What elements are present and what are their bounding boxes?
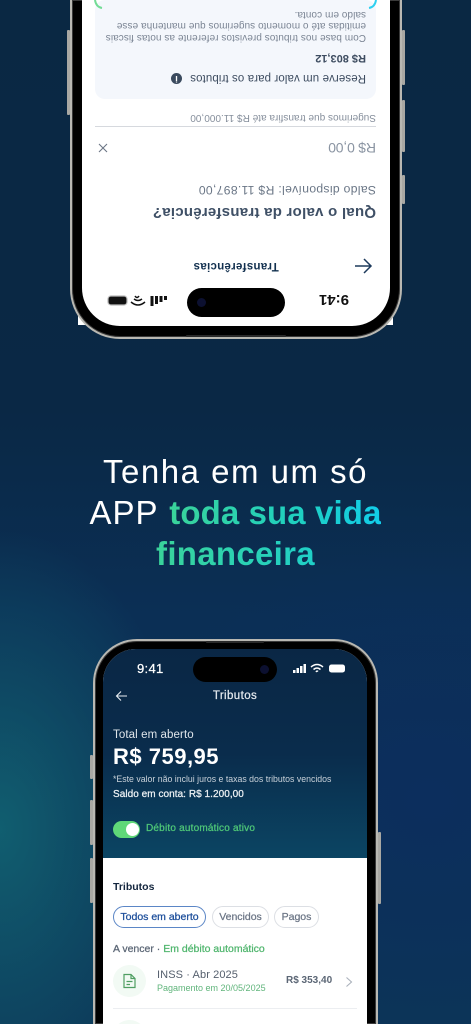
dynamic island [187, 288, 285, 317]
info icon: i [175, 74, 178, 84]
screen title: Transferências [193, 260, 279, 272]
filter chip: all: Todos em aberto [120, 911, 199, 923]
phone frame [93, 639, 378, 1024]
section title: Tributos [113, 881, 154, 893]
card description: saldo em conta. [294, 9, 366, 20]
row divider [113, 1008, 357, 1009]
panel: lower phone [90, 639, 381, 1024]
filter chip: paid [274, 906, 319, 928]
total amount: R$ 759,95 [113, 744, 219, 769]
tax row icon [113, 965, 146, 997]
filter chip: overdue [212, 906, 269, 928]
heading [90, 453, 381, 572]
tax row amount: R$ 353,40 [286, 975, 332, 986]
status time: 9:41 [319, 291, 349, 308]
panel: reserve tax card [95, 0, 376, 99]
card description: Com base nos tributos previstos referente as notas fiscais [106, 32, 366, 43]
phone frame [70, 0, 402, 339]
question heading: Qual o valor da transferência? [153, 204, 376, 221]
tax row chevron [346, 977, 352, 987]
clear icon [98, 144, 108, 152]
next row icon [119, 1020, 140, 1024]
tax row date: Pagamento em 20/05/2025 [157, 983, 266, 993]
disclaimer: *Este valor não inclui juros e taxas dos tributos vencidos [113, 774, 331, 784]
phone screen [103, 649, 367, 1024]
group label: A vencer · Em débito automático [113, 943, 265, 955]
toggle [113, 820, 140, 838]
card gradient corners [94, 0, 377, 9]
card title: Reserve um valor para os tributos [190, 72, 366, 84]
side buttons [67, 30, 405, 204]
heading: APP toda sua vida [90, 494, 381, 531]
filter chip: paid: Pagos [282, 911, 311, 923]
back arrow [355, 258, 372, 274]
rotated phone body [70, 0, 402, 339]
filter chip: all [113, 906, 206, 928]
back arrow [116, 691, 127, 701]
status icons [107, 295, 167, 306]
card amount: R$ 803,12 [315, 52, 366, 64]
screen title: Tributos [213, 690, 257, 702]
filter chip: overdue: Vencidos [219, 911, 262, 923]
info icon [171, 73, 182, 84]
toggle label: Débito automático ativo [146, 823, 255, 834]
available balance: Saldo disponível: R$ 11.897,00 [198, 183, 376, 197]
status icons [293, 664, 345, 673]
panel: upper phone upside down [67, 0, 405, 339]
heading: Tenha em um só [103, 453, 368, 490]
card description: emitidas até o momento sugerimos que mantenha esse [117, 20, 366, 32]
status time: 9:41 [137, 661, 164, 676]
suggestion note: Sugerimos que transfira até R$ 11.000,00 [190, 112, 376, 123]
account balance: Saldo em conta: R$ 1.200,00 [113, 788, 244, 800]
phone screen [82, 0, 390, 326]
amount input: R$ 0,00 [328, 140, 376, 156]
phone top notch detail [206, 641, 264, 643]
total label: Total em aberto [113, 729, 194, 741]
home notch detail [186, 335, 286, 337]
white sheet behind phone [78, 0, 393, 325]
panel: dark header [103, 649, 367, 858]
heading: financeira [156, 534, 315, 572]
tax row title: INSS · Abr 2025 [157, 969, 238, 981]
dynamic island [193, 657, 277, 682]
input underline [95, 126, 376, 127]
side buttons [90, 755, 381, 904]
card description [106, 9, 366, 43]
